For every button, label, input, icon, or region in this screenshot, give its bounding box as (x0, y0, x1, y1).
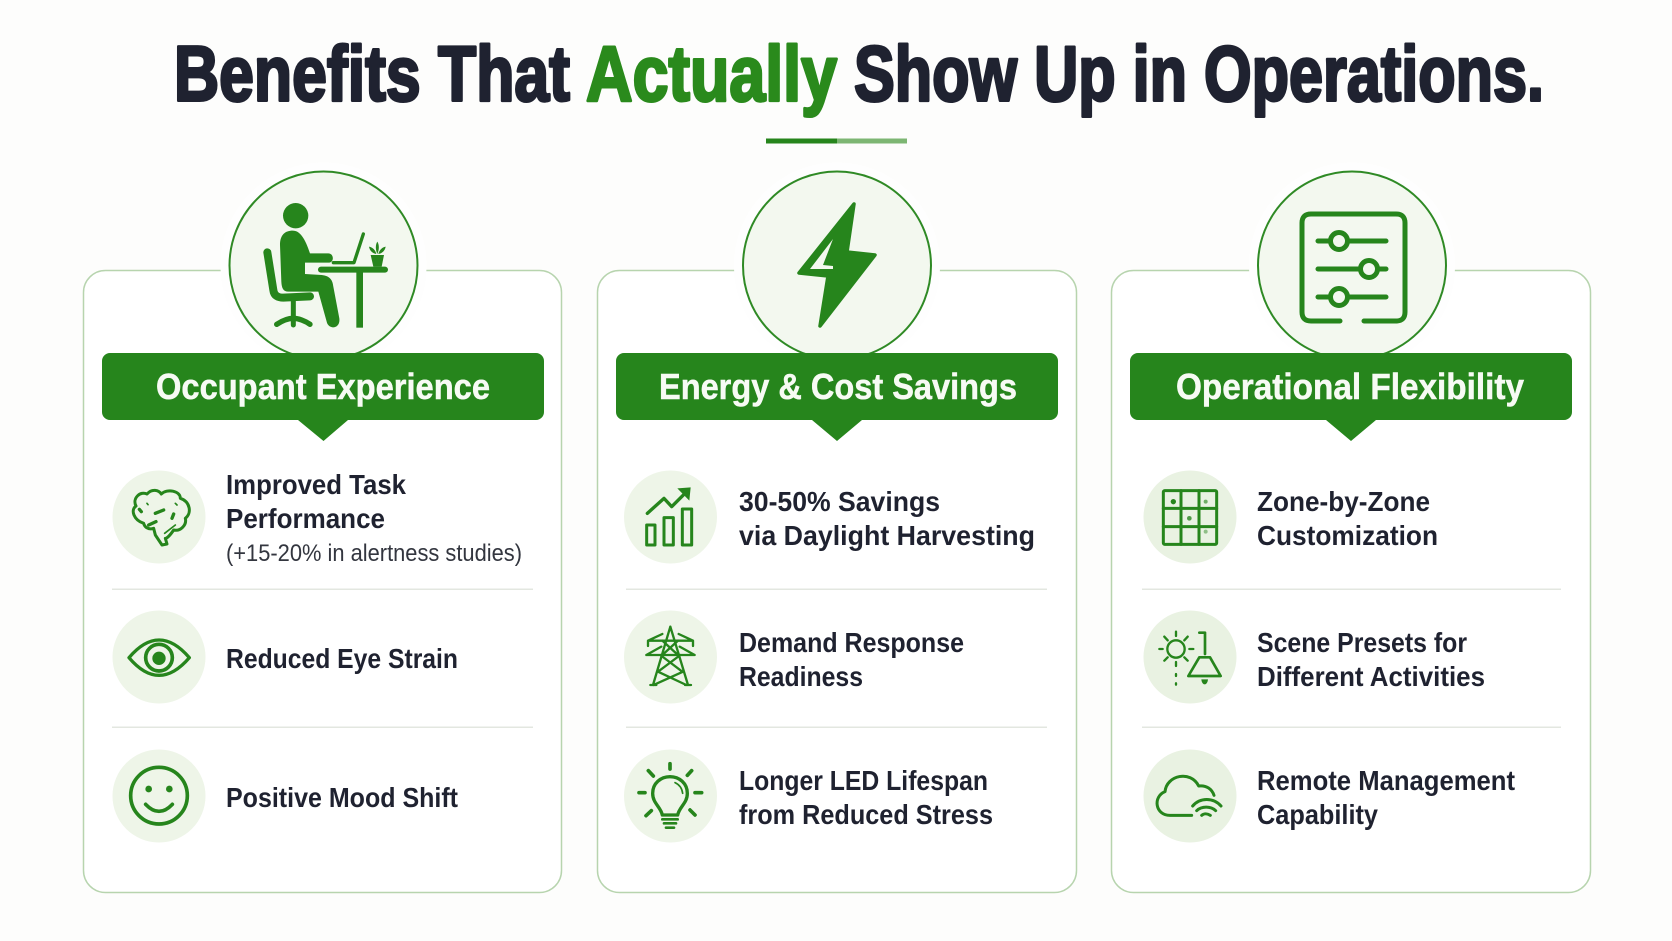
benefit: savings via daylight harvesting: 30-50% Savings (739, 486, 940, 517)
benefit: demand response readiness (624, 610, 964, 704)
banner: operational flexibility (1130, 353, 1572, 441)
title: Benefits That (174, 30, 570, 118)
benefit: demand response readiness: Readiness (739, 661, 863, 692)
panel: occupant experience (84, 162, 562, 892)
benefit: positive mood shift: Positive Mood Shift (226, 782, 458, 813)
header circle (1249, 162, 1455, 368)
banner: operational flexibility: Operational Flexibility (1176, 366, 1524, 407)
icon: smiley (131, 767, 187, 824)
banner: occupant experience: Occupant Experience (156, 366, 490, 407)
header circle (734, 162, 940, 368)
benefit: scene presets: Different Activities (1257, 661, 1485, 692)
divider (1142, 726, 1561, 728)
benefit: zone-by-zone customization: Zone-by-Zone (1257, 486, 1430, 517)
benefit: savings via daylight harvesting: via Daylight Harvesting (739, 520, 1035, 551)
benefit: longer LED lifespan: Longer LED Lifespan (739, 765, 988, 796)
divider (112, 726, 533, 728)
header circle (220, 162, 426, 368)
benefit: reduced eye strain (112, 610, 458, 704)
icon: growth chart (647, 487, 692, 545)
banner: energy and cost savings (616, 353, 1058, 441)
benefit: improved task performance: (+15-20% in alertness studies) (226, 540, 522, 567)
divider (112, 588, 533, 590)
benefit: longer LED lifespan: from Reduced Stress (739, 799, 993, 830)
icon: transmission tower (646, 627, 695, 685)
divider (626, 726, 1047, 728)
title underline accent (766, 138, 907, 144)
benefit: scene presets: Scene Presets for (1257, 627, 1467, 658)
banner: occupant experience (102, 353, 544, 441)
card outline (1112, 270, 1590, 892)
benefit: zone-by-zone customization (1144, 470, 1438, 564)
benefit: reduced eye strain: Reduced Eye Strain (226, 643, 458, 674)
panel: energy and cost savings (598, 162, 1076, 892)
benefit: remote management: Remote Management (1257, 765, 1515, 796)
icon: eye (129, 640, 189, 675)
icon: light bulb (639, 764, 702, 828)
benefit: longer LED lifespan (624, 750, 993, 842)
card outline (84, 270, 562, 892)
icon: sun and pendant lamp (1159, 632, 1221, 685)
title: Actually (586, 30, 837, 118)
benefit: scene presets (1144, 610, 1485, 704)
icon: cloud with wifi (1157, 776, 1221, 815)
icon: lightning bolt (799, 204, 875, 326)
divider (1142, 588, 1561, 590)
benefit: positive mood shift (112, 750, 458, 842)
benefit: improved task performance (112, 469, 522, 567)
panel: operational flexibility (1112, 162, 1590, 892)
divider (626, 588, 1047, 590)
icon: brain (133, 490, 189, 545)
title (174, 30, 1544, 118)
icon: zone grid (1163, 491, 1217, 544)
benefit: demand response readiness: Demand Response (739, 627, 964, 658)
benefit: remote management (1144, 750, 1515, 842)
icon: control sliders (1302, 214, 1405, 321)
benefit: savings via daylight harvesting (624, 470, 1035, 564)
icon: person at desk (267, 203, 388, 328)
benefit: zone-by-zone customization: Customization (1257, 520, 1438, 551)
benefit: improved task performance: Improved Task (226, 469, 406, 500)
benefit: remote management: Capability (1257, 799, 1378, 830)
benefit: improved task performance: Performance (226, 503, 385, 534)
banner: energy and cost savings: Energy & Cost Savings (659, 366, 1017, 407)
card outline (598, 270, 1076, 892)
